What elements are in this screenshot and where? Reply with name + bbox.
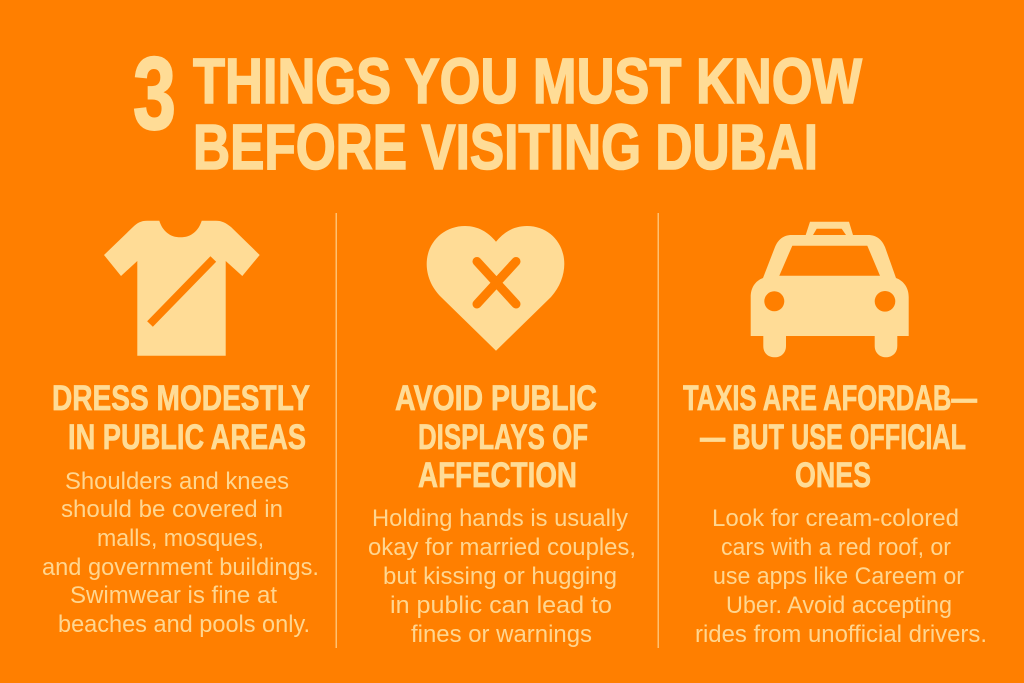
text: dress details: and government buildings. [42, 554, 319, 581]
text: dress details: should be covered in [61, 496, 283, 523]
icon: heart with cross [427, 226, 564, 351]
heading: dress modestly: DRESS MODESTLY [52, 378, 310, 418]
heading: avoid public displays: AVOID PUBLIC [395, 378, 597, 418]
heading: avoid public displays: AFFECTION [418, 455, 577, 495]
text: dress details [42, 468, 319, 638]
title: 3 [133, 36, 176, 151]
text: affection details [368, 505, 636, 648]
text: affection details: fines or warnings [411, 621, 592, 648]
heading: dress modestly [52, 378, 310, 457]
text: affection details: Holding hands is usually [372, 505, 628, 532]
text: taxi details: Look for cream-colored [712, 505, 959, 532]
text: taxi details: rides from unofficial drivers. [695, 621, 987, 648]
heading: taxis are affordable: ONES [795, 455, 871, 495]
icon: t-shirt with slash [104, 221, 260, 356]
text: affection details: in public can lead to [390, 592, 612, 619]
text: dress details: Swimwear is fine at [70, 582, 277, 609]
heading: avoid public displays [395, 378, 597, 495]
panel: taxis [683, 222, 987, 648]
text: taxi details [695, 505, 987, 648]
text: taxi details: cars with a red roof, or [721, 534, 951, 561]
panel: dress modestly [42, 221, 319, 638]
text: dress details: Shoulders and knees [65, 468, 289, 495]
panel: public displays of affection [368, 226, 636, 648]
heading: avoid public displays: DISPLAYS OF [418, 417, 588, 457]
text: taxi details: Uber. Avoid accepting [726, 592, 952, 619]
text: affection details: okay for married couples, [368, 534, 636, 561]
heading: dress modestly: IN PUBLIC AREAS [68, 417, 306, 457]
text: affection details: but kissing or hugging [383, 563, 617, 590]
title: THINGS YOU MUST KNOW [193, 45, 862, 117]
text: dress details: malls, mosques, [97, 525, 264, 552]
heading: taxis are affordable [683, 378, 977, 495]
text: taxi details: use apps like Careem or [713, 563, 964, 590]
text: dress details: beaches and pools only. [58, 611, 310, 638]
title [133, 36, 862, 183]
title: BEFORE VISITING DUBAI [193, 111, 818, 183]
icon: taxi [751, 222, 909, 357]
